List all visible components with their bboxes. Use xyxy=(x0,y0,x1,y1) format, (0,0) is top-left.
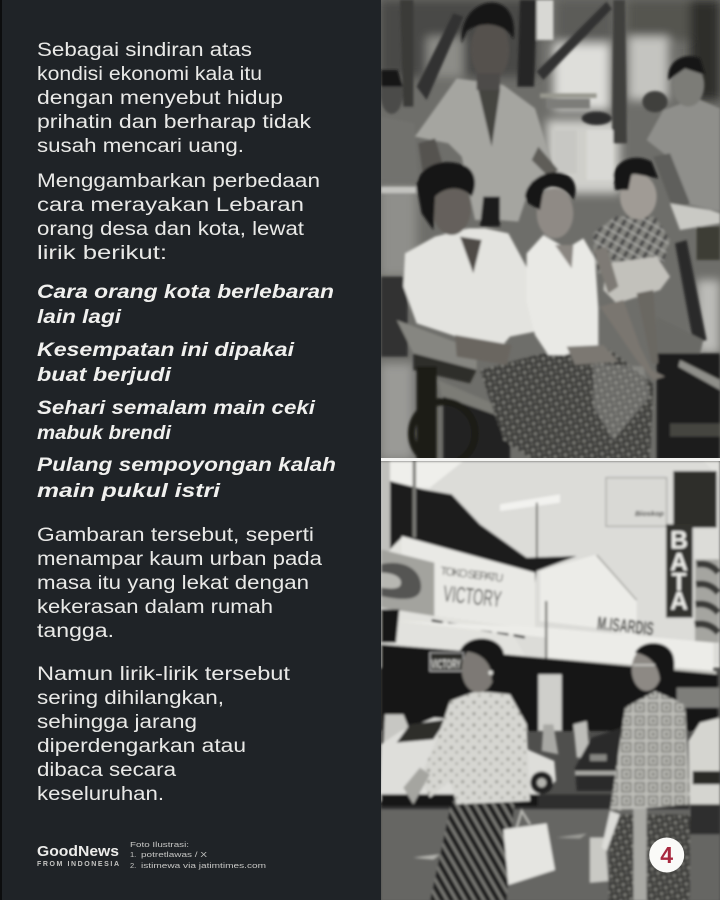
photo credits xyxy=(130,840,266,870)
page number badge xyxy=(649,838,684,872)
logo: GoodNews from Indonesia xyxy=(37,844,119,868)
photo: women at shopping street: Bioskop xyxy=(635,509,664,518)
photo: women at shopping street: TOKO SEPATU xyxy=(440,565,504,585)
text block: economic satire: prihatin dan berharap tidak xyxy=(37,112,312,133)
text block: village and city: Menggambarkan perbedaan xyxy=(37,171,320,192)
text block: lyrics removed xyxy=(37,664,291,805)
lyrics in bold italic: buat berjudi xyxy=(37,365,172,386)
trees xyxy=(517,0,537,87)
car: white, right xyxy=(688,718,720,818)
photo: women at shopping street: B xyxy=(670,527,688,554)
page number badge: 4 xyxy=(660,842,673,868)
dark text panel xyxy=(0,0,381,900)
text block: economic satire: kondisi ekonomi kala itu xyxy=(37,64,262,85)
text block: urban criticism: kekerasan dalam rumah xyxy=(37,597,273,618)
logo: GoodNews from Indonesia: GoodNews xyxy=(37,844,119,860)
awning xyxy=(397,621,713,673)
text block: economic satire: dengan menyebut hidup xyxy=(37,88,283,109)
text block: lyrics removed: Namun lirik-lirik tersebut xyxy=(37,664,291,685)
text block: lyrics removed: sering dihilangkan, xyxy=(37,688,224,709)
text block: village and city: cara merayakan Lebaran xyxy=(37,195,304,216)
lyrics in bold italic: Sehari semalam main ceki xyxy=(37,398,316,419)
photo: women at shopping street: A xyxy=(670,588,688,615)
logo: GoodNews from Indonesia: FROM INDONESIA xyxy=(37,861,119,868)
car: white, left xyxy=(379,718,556,801)
text block: urban criticism: masa itu yang lekat dengan xyxy=(37,573,309,594)
text block: economic satire: Sebagai sindiran atas xyxy=(37,40,252,61)
photo: women at shopping street: VICTORY xyxy=(442,580,503,612)
gable wall xyxy=(540,554,637,638)
photo credits: potretlawas / X xyxy=(141,850,207,859)
text block: economic satire xyxy=(37,40,312,157)
text block: lyrics removed: keseluruhan. xyxy=(37,784,164,805)
batik skirts xyxy=(480,350,653,460)
left woman xyxy=(430,798,515,900)
building xyxy=(380,461,720,668)
left woman xyxy=(403,228,543,360)
lyrics in bold italic: mabuk brendi xyxy=(37,423,172,444)
lyrics in bold italic: Pulang sempoyongan kalah xyxy=(37,455,336,476)
lyrics in bold italic: lain lagi xyxy=(37,307,122,328)
text block: village and city: orang desa dan kota, lewat xyxy=(37,219,305,240)
text block: urban criticism: menampar kaum urban pada xyxy=(37,549,322,570)
child xyxy=(593,217,670,273)
lyrics in bold italic: Kesempatan ini dipakai xyxy=(37,340,295,361)
text block: village and city xyxy=(37,171,320,264)
rear man xyxy=(415,78,555,222)
text block: lyrics removed: sehingga jarang xyxy=(37,712,197,733)
photo credits: 2. xyxy=(130,861,136,870)
sign: Bata xyxy=(666,524,693,618)
text block: urban criticism: tangga. xyxy=(37,621,114,642)
right man xyxy=(647,98,720,212)
distant crowd xyxy=(582,112,612,125)
pedestrians in background xyxy=(383,714,410,744)
photo: women at shopping street: A xyxy=(670,549,688,576)
text block: village and city: lirik berikut: xyxy=(37,243,167,264)
photo: women at shopping street: T xyxy=(671,569,687,596)
road xyxy=(381,794,720,900)
photo: family in a becak xyxy=(380,0,720,465)
shopping bag xyxy=(503,823,555,885)
photo credits: istimewa via jatimtimes.com xyxy=(141,861,266,870)
lyrics in bold italic: Cara orang kota berlebaran xyxy=(37,282,334,303)
photo credits: Foto Ilustrasi: xyxy=(130,840,189,849)
right woman xyxy=(608,814,690,900)
becak frame xyxy=(381,277,408,357)
text block: lyrics removed: diperdengarkan atau xyxy=(37,736,246,757)
text block: urban criticism xyxy=(37,525,322,642)
text block: urban criticism: Gambaran tersebut, seperti xyxy=(37,525,314,546)
lyrics in bold italic xyxy=(37,282,336,502)
photo credits: 1. xyxy=(130,850,136,859)
sign: Victory xyxy=(402,536,535,629)
text block: lyrics removed: dibaca secara xyxy=(37,760,177,781)
car: dark, centre xyxy=(575,728,622,791)
photo: women at shopping street xyxy=(379,461,720,900)
tiled roof xyxy=(390,481,577,594)
photo: women at shopping street: VICTORY xyxy=(431,657,461,671)
lyrics in bold italic: main pukul istri xyxy=(37,481,221,502)
second woman xyxy=(527,235,598,355)
left man xyxy=(381,117,418,180)
shop interior xyxy=(381,609,399,643)
sign: M. Isardis: M.ISARDIS xyxy=(596,612,655,639)
text block: economic satire: susah mencari uang. xyxy=(37,136,244,157)
